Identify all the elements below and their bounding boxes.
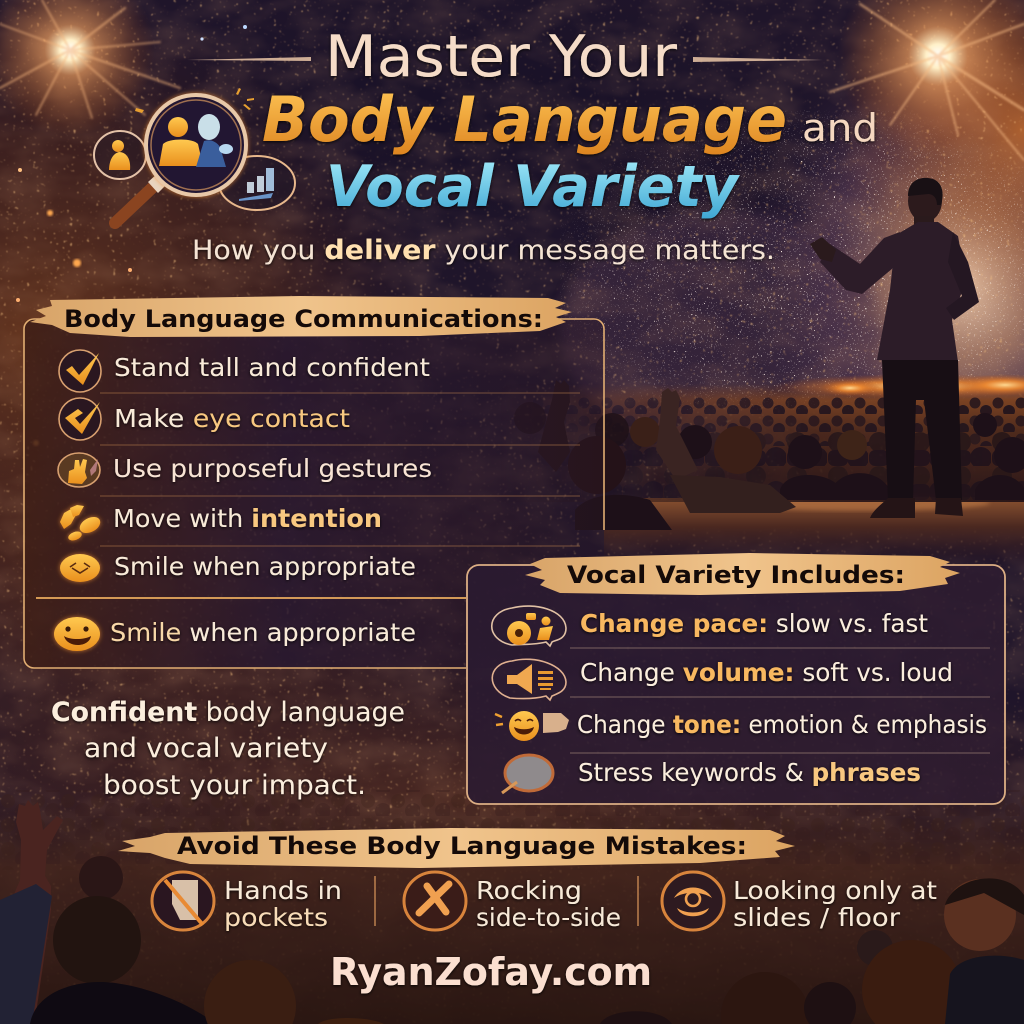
- icon: eye: [662, 872, 724, 930]
- item: stand tall: [59, 350, 430, 392]
- title: Body Language: [262, 83, 787, 156]
- hand: [810, 237, 836, 262]
- item: stress: [502, 755, 921, 793]
- jacket: [877, 222, 966, 362]
- item: looking only at slides: Looking only at: [733, 876, 937, 905]
- heading banner: Avoid These Body Language Mistakes:: [177, 832, 747, 860]
- item: tone: Change tone: emotion & emphasis: [577, 710, 987, 739]
- heading banner: [525, 553, 960, 595]
- item: volume: [492, 658, 953, 700]
- icon: magnifier: [502, 755, 553, 793]
- icon: check with outline: [59, 398, 101, 440]
- item: looking only at slides: slides / floor: [733, 903, 901, 932]
- audience: foreground silhouettes: [0, 800, 1024, 1024]
- panel: body language communications: [24, 296, 604, 668]
- callout: confident body language: Confident body language: [51, 697, 405, 728]
- heading banner: Body Language Communications:: [64, 305, 543, 333]
- icon: footprints: [60, 505, 103, 542]
- item: looking only at slides: [662, 872, 937, 932]
- audience: distant crowd behind speaker: [0, 374, 1024, 870]
- item: eye contact: Make eye contact: [114, 404, 350, 433]
- heading banner: Vocal Variety Includes:: [567, 561, 905, 589]
- icon: magnifying glass with people: [94, 88, 295, 223]
- subtitle: How you deliver your message matters.: [192, 235, 775, 266]
- icon: crossed figure: [404, 872, 466, 930]
- callout: confident body language: and vocal variety: [84, 733, 328, 764]
- item: smile 2: Smile when appropriate: [110, 618, 416, 647]
- icon: smile face: [60, 554, 100, 582]
- icon: laughing face and fist: [495, 711, 569, 741]
- item: hands in pockets: Hands in: [224, 876, 342, 905]
- item: hands in pockets: [152, 872, 342, 932]
- item: pace: [492, 606, 928, 646]
- panel frame: [24, 319, 604, 668]
- icon: speaker: [492, 659, 566, 700]
- icon: check: [59, 350, 101, 392]
- website url: RyanZofay.com: [330, 950, 652, 994]
- spotlight: top left: [0, 0, 180, 135]
- icon: hand: [58, 453, 100, 487]
- title: Master Your: [325, 24, 678, 90]
- item: gestures: Use purposeful gestures: [113, 454, 432, 483]
- item: volume: Change volume: soft vs. loud: [580, 658, 953, 687]
- title: and: [802, 106, 878, 150]
- item: eye contact: [59, 398, 350, 440]
- item: rocking: [404, 872, 621, 932]
- item: hands in pockets: pockets: [224, 903, 328, 932]
- heading banner: [30, 296, 572, 337]
- speaker silhouette: [810, 178, 979, 518]
- item: gestures: [58, 453, 432, 487]
- item: move: [60, 504, 382, 542]
- spotlight: top right: [830, 0, 1024, 160]
- icon: open smile: [54, 617, 100, 651]
- panel background: [24, 319, 604, 668]
- item: pace: Change pace: slow vs. fast: [580, 609, 928, 638]
- callout: confident body language: [51, 697, 405, 801]
- item: stress: Stress keywords & phrases: [578, 758, 921, 787]
- panel: vocal variety: [467, 553, 1005, 804]
- icon: crossed pocket: [152, 872, 214, 930]
- item: smile 1: Smile when appropriate: [114, 552, 416, 581]
- shoes: [870, 498, 963, 518]
- heading banner: [118, 828, 795, 868]
- title: [187, 24, 878, 220]
- item: rocking: side-to-side: [476, 903, 621, 932]
- callout: confident body language: boost your impact.: [103, 770, 366, 801]
- audience: middle rows with raised hands: [514, 380, 1024, 530]
- legs: [882, 360, 962, 500]
- item: stand tall: Stand tall and confident: [114, 353, 430, 382]
- icon: snail and person: [492, 606, 566, 646]
- other arm: [946, 232, 979, 320]
- pointing arm: [820, 232, 900, 294]
- title rules: [187, 57, 823, 62]
- title: Vocal Variety: [326, 154, 741, 220]
- panel: mistakes to avoid: [118, 828, 937, 941]
- item: move: Move with intention: [113, 504, 382, 533]
- head: [908, 178, 943, 228]
- stage and horizon glow: [604, 495, 1024, 570]
- item: rocking: Rocking: [476, 876, 582, 905]
